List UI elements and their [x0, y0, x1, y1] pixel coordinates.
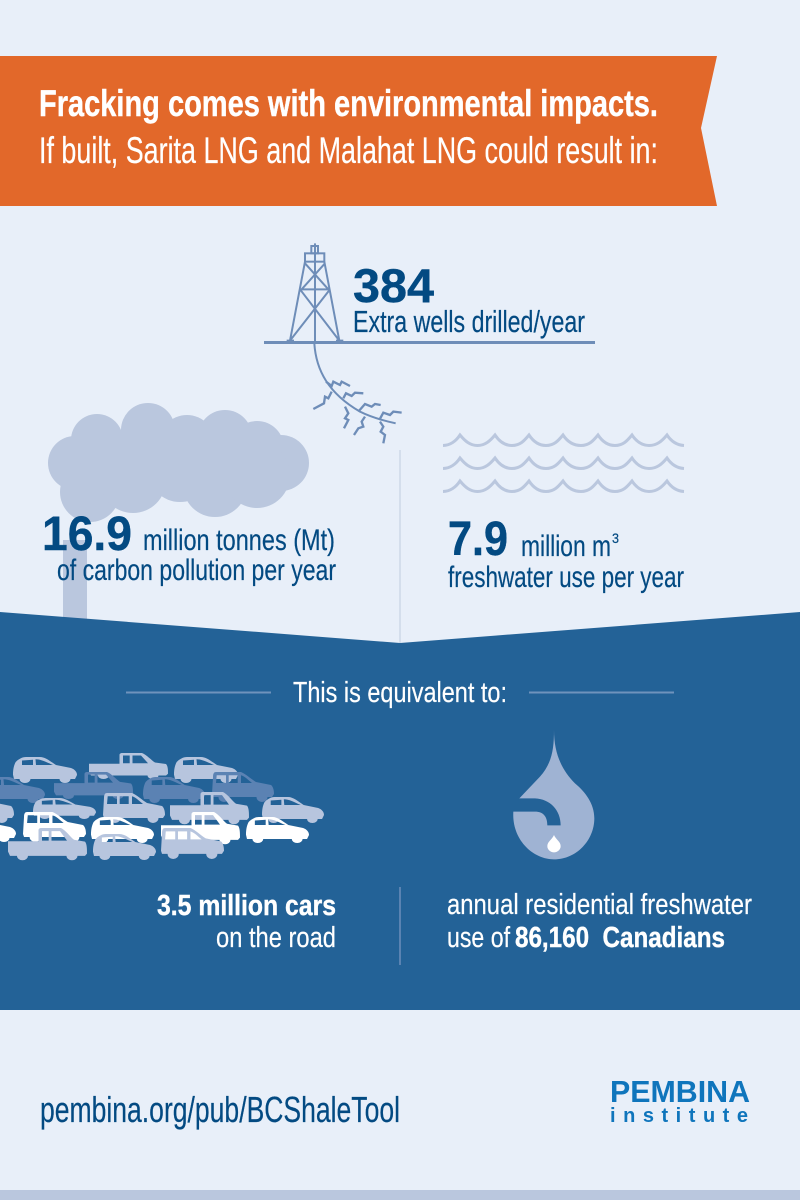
icon: water waves — [443, 435, 684, 492]
panel: equivalents — [0, 612, 800, 1010]
banner: heading — [0, 56, 717, 206]
stat: freshwater use — [448, 513, 684, 594]
stat: freshwater use: million m — [521, 530, 611, 563]
stat: wells drilled: Extra wells drilled/year — [353, 304, 585, 339]
caption: cars on the road: 3.5 million cars — [157, 890, 336, 922]
stat: carbon pollution: million tonnes (Mt) — [143, 524, 335, 557]
caption: residential freshwater: 86,160 Canadians — [515, 922, 725, 954]
caption: cars on the road — [157, 890, 336, 954]
stat: freshwater use: 7.9 — [448, 513, 508, 566]
caption: residential freshwater — [447, 889, 752, 954]
stat: carbon pollution: 16.9 — [42, 508, 132, 561]
icon: water drop with faucet — [513, 730, 594, 859]
stat: wells drilled: 384 — [353, 259, 434, 312]
footer url: pembina.org/pub/BCShaleTool — [40, 1089, 400, 1130]
stat: wells drilled — [353, 259, 585, 339]
divider lower — [399, 887, 401, 965]
stat: carbon pollution: of carbon pollution per year — [57, 554, 336, 587]
divider upper — [399, 450, 401, 643]
icon: cars — [0, 753, 324, 860]
caption: residential freshwater: use of — [447, 922, 511, 954]
icon: smokestack and cloud — [48, 403, 309, 625]
logo: Pembina Institute — [610, 1074, 750, 1127]
stat: freshwater use: freshwater use per year — [448, 561, 684, 594]
icon: small white drop — [547, 835, 561, 852]
stat: carbon pollution — [42, 508, 336, 587]
icon: drilling derrick and fractures — [264, 243, 595, 443]
logo: Pembina Institute: institute — [610, 1105, 748, 1127]
subheading: this is equivalent to: This is equivalent to: — [293, 677, 507, 709]
bottom strip — [0, 1190, 800, 1200]
logo: Pembina Institute: PEMBINA — [610, 1074, 750, 1109]
caption: cars on the road: on the road — [216, 922, 336, 954]
stat: freshwater use: 3 — [612, 530, 619, 546]
